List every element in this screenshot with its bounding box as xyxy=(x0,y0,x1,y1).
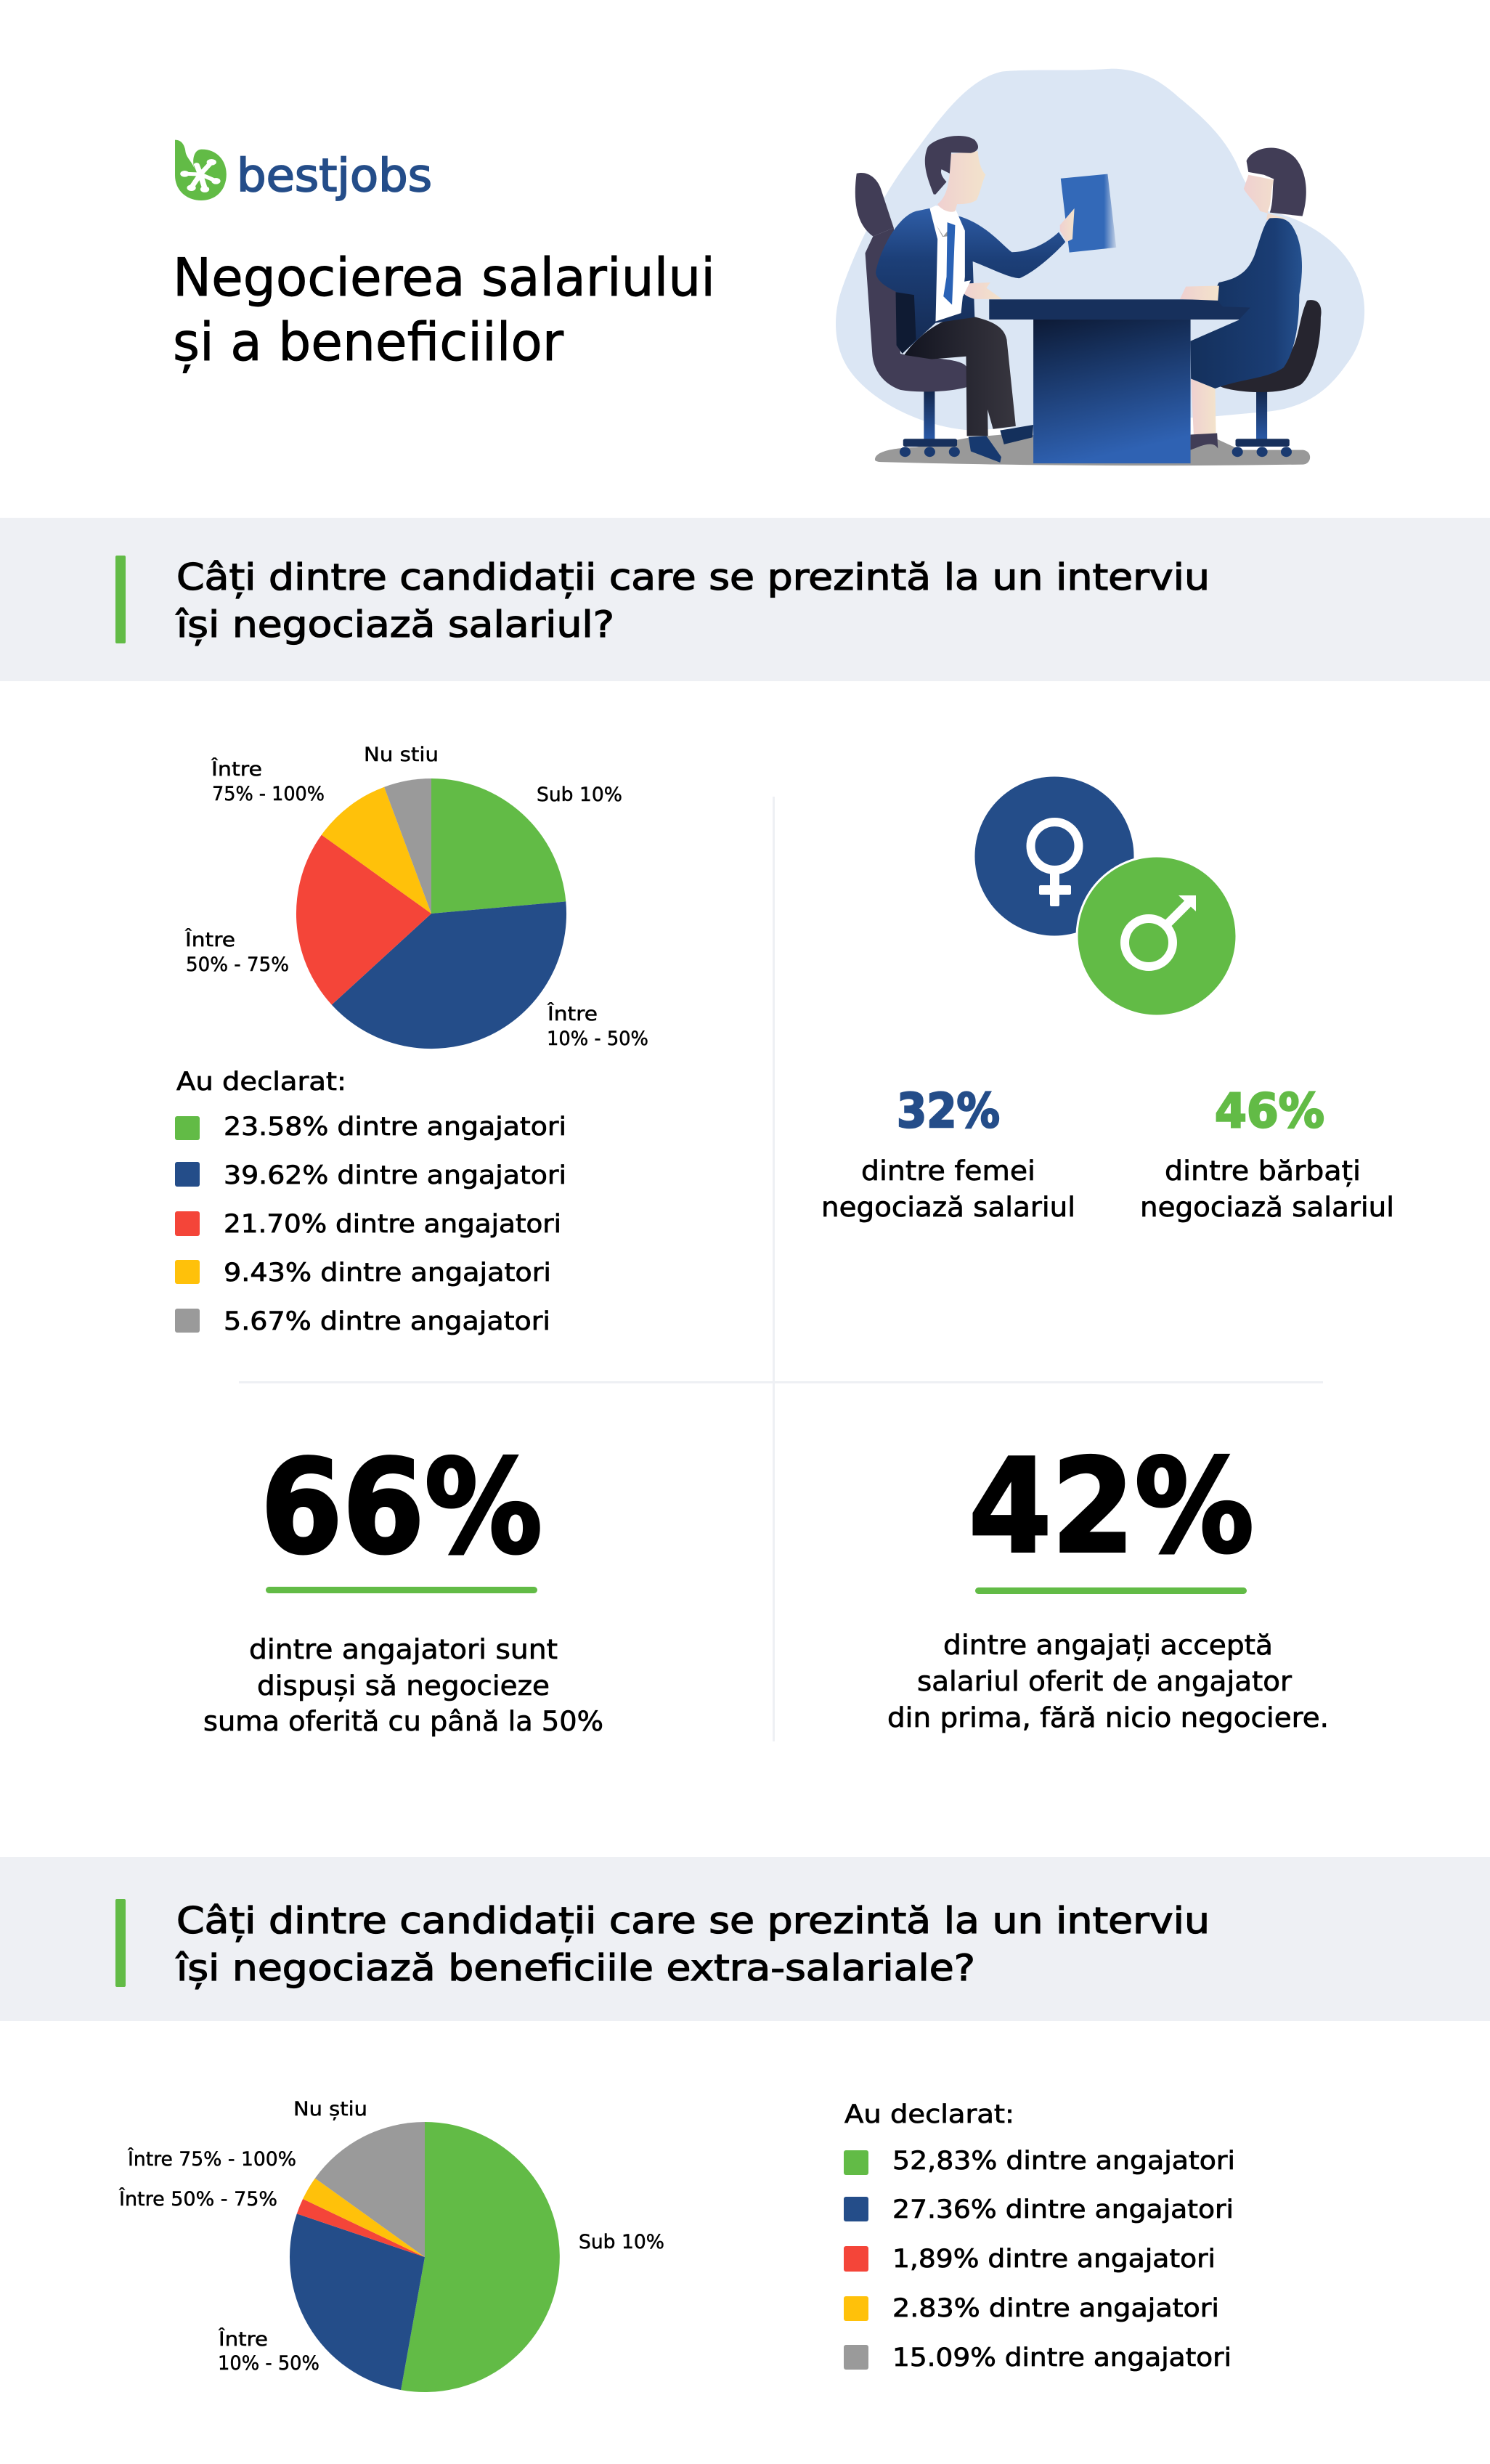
description: dispuși să negocieze xyxy=(257,1670,550,1701)
pie labels: 50% - 75% xyxy=(186,954,289,976)
pie labels: Sub 10% xyxy=(579,2231,664,2253)
icon: green drop logo mark xyxy=(175,140,227,200)
stat: 32% women: dintre femei xyxy=(861,1155,1035,1187)
pie labels xyxy=(118,2098,664,2375)
stat: 32% women xyxy=(821,1084,1075,1223)
icon: female symbol circle xyxy=(974,777,1134,935)
stat: 32% women: negociază salariul xyxy=(821,1192,1075,1223)
heading text 1: Câți dintre candidații care se prezintă la un interviu xyxy=(176,556,1210,598)
green underline xyxy=(266,1587,537,1593)
pie chart 2 xyxy=(118,2098,664,2392)
legend row: green: 23.58% dintre angajatori xyxy=(224,1113,566,1142)
description xyxy=(887,1630,1329,1733)
pie labels: 10% - 50% xyxy=(218,2352,319,2375)
legend row: grey: 5.67% dintre angajatori xyxy=(224,1307,550,1336)
pie labels: Între xyxy=(211,757,262,781)
heading text 2: Câți dintre candidații care se prezintă la un interviu xyxy=(176,1900,1210,1942)
stat: 46% men: 46% xyxy=(1215,1084,1324,1139)
stat: 46% men: negociază salariul xyxy=(1140,1192,1394,1223)
heading text 2 xyxy=(176,1900,1210,1989)
green underline xyxy=(975,1587,1247,1594)
legend row: grey: 15.09% dintre angajatori xyxy=(892,2343,1232,2372)
legend row: red: 1,89% dintre angajatori xyxy=(892,2245,1216,2274)
stat: 46% men xyxy=(1140,1084,1394,1223)
man's hand on document xyxy=(1060,208,1075,242)
legend 2 xyxy=(844,2100,1235,2372)
title xyxy=(173,247,715,373)
heading band 2 xyxy=(0,1857,1490,2021)
woman xyxy=(1180,147,1306,450)
left chair xyxy=(855,173,967,457)
pie labels: 10% - 50% xyxy=(547,1028,648,1050)
table xyxy=(989,299,1250,463)
pie labels xyxy=(184,744,648,1050)
heading text 1: își negociază salariul? xyxy=(176,603,614,646)
stat: 66%: 66% xyxy=(261,1432,542,1582)
pie labels: Între xyxy=(218,2327,268,2351)
stat: 32% women: 32% xyxy=(897,1084,1000,1139)
legend 1 xyxy=(175,1068,566,1336)
legend 2: Au declarat: xyxy=(844,2100,1014,2129)
pie labels: 75% - 100% xyxy=(212,783,325,805)
heading band 1 xyxy=(0,518,1490,681)
title: Negocierea salariului xyxy=(173,247,715,308)
green accent bar xyxy=(115,1899,126,1987)
description: salariul oferit de angajator xyxy=(917,1666,1292,1697)
document xyxy=(1061,174,1116,253)
pie labels: Între xyxy=(547,1002,598,1025)
legend 1: Au declarat: xyxy=(176,1068,346,1097)
icon: male symbol circle xyxy=(1077,856,1237,1016)
illustration: salary negotiation interview xyxy=(836,69,1364,465)
legend row: yellow: 2.83% dintre angajatori xyxy=(892,2294,1219,2323)
legend row: blue: 39.62% dintre angajatori xyxy=(224,1161,566,1190)
pie chart 1 xyxy=(184,744,648,1050)
stat: 42%: 42% xyxy=(969,1431,1254,1582)
description xyxy=(203,1634,603,1737)
pie labels: Între 50% - 75% xyxy=(118,2187,277,2211)
man xyxy=(876,136,1065,463)
title: și a beneficiilor xyxy=(173,312,563,373)
legend row: blue: 27.36% dintre angajatori xyxy=(892,2195,1234,2224)
logo: bestjobs xyxy=(175,140,432,202)
logo wordmark: bestjobs xyxy=(237,149,432,202)
pie labels: Nu stiu xyxy=(364,744,439,766)
pie labels: Între 75% - 100% xyxy=(127,2147,296,2171)
stat: 46% men: dintre bărbați xyxy=(1165,1155,1361,1187)
pie labels: Sub 10% xyxy=(537,784,622,806)
pie labels: Între xyxy=(184,928,235,951)
stat: 42% xyxy=(887,1431,1329,1733)
description: suma oferită cu până la 50% xyxy=(203,1706,603,1737)
legend row: red: 21.70% dintre angajatori xyxy=(224,1210,561,1239)
legend row: green: 52,83% dintre angajatori xyxy=(892,2147,1235,2176)
right chair xyxy=(1218,300,1322,457)
description: din prima, fără nicio negociere. xyxy=(887,1702,1329,1733)
background blob xyxy=(836,69,1364,431)
pie labels: Nu știu xyxy=(293,2098,367,2121)
legend row: yellow: 9.43% dintre angajatori xyxy=(224,1259,551,1288)
green accent bar xyxy=(115,556,126,643)
floor shadow xyxy=(875,434,1310,465)
description: dintre angajați acceptă xyxy=(943,1630,1273,1661)
stat: 66% xyxy=(203,1432,603,1737)
description: dintre angajatori sunt xyxy=(249,1634,558,1665)
heading text 2: își negociază beneficiile extra-salariale? xyxy=(176,1947,975,1989)
heading text 1 xyxy=(176,556,1210,646)
